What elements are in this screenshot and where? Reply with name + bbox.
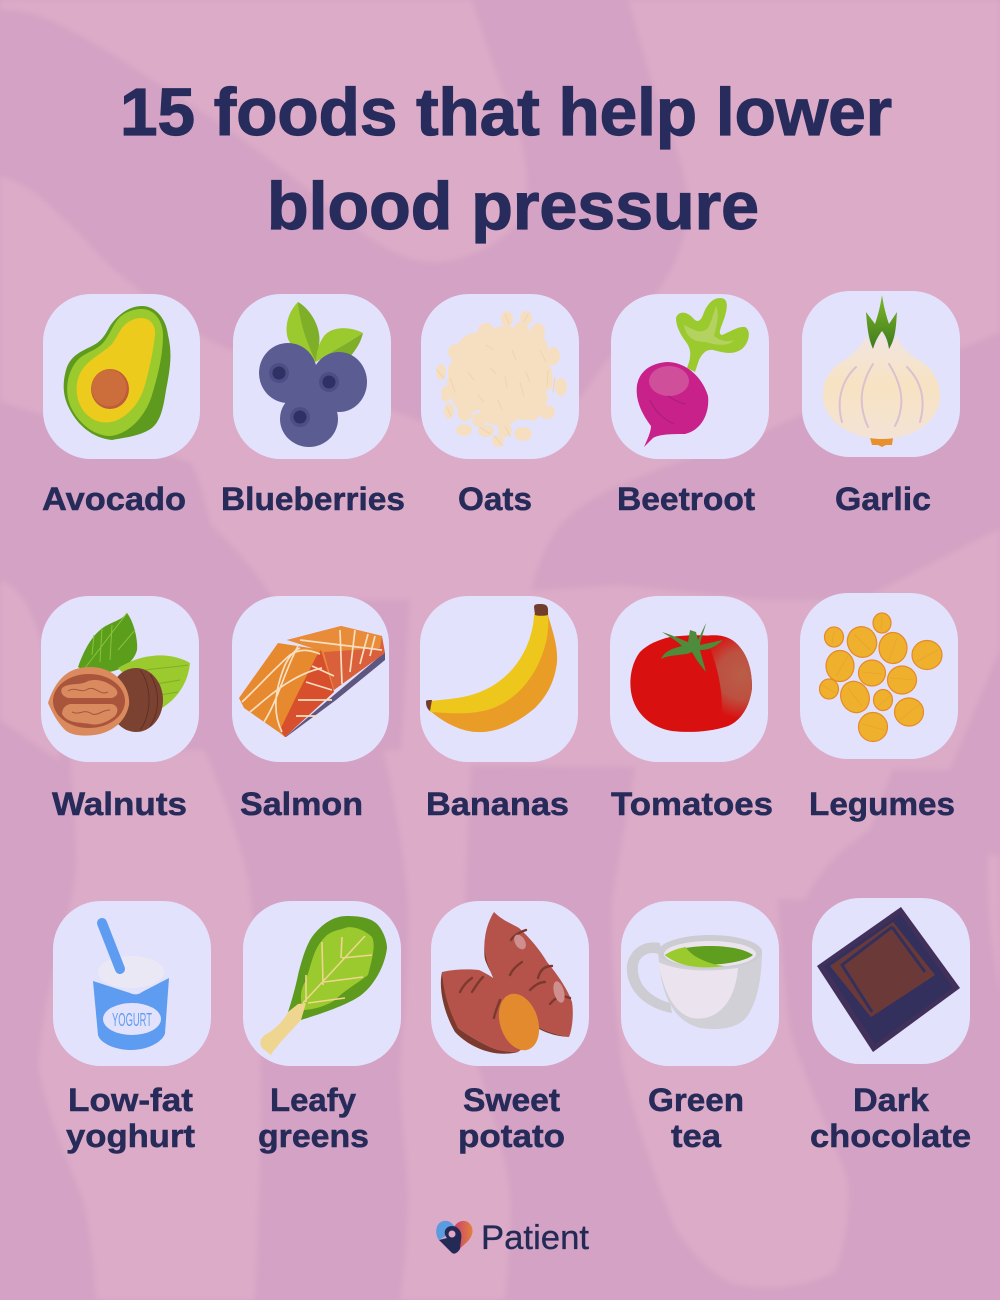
labels [810,1082,971,1154]
icon: blueberries [259,302,367,447]
icon: oats [436,311,567,447]
label: Oats [458,481,532,517]
item: blueberries [221,294,405,517]
label: Walnuts [52,786,187,822]
labels: potato [458,1118,565,1154]
label: Garlic [835,481,931,517]
label: Beetroot [617,481,755,517]
item: tomatoes [610,596,773,822]
label: Blueberries [221,481,405,517]
icon: salmon [239,626,385,737]
wordmark: Patient [481,1219,590,1257]
labels: Low-fat [68,1082,193,1118]
item: walnuts [41,596,199,822]
item: beetroot [611,294,769,517]
icon: chocolate [817,907,960,1052]
label: Salmon [240,786,363,822]
logo: Patient [436,1219,590,1257]
title [120,75,892,244]
labels [458,1082,565,1154]
labels: greens [258,1118,369,1154]
icon: beetroot [637,298,749,447]
item: sweet potato [431,901,589,1154]
icon: garlic [823,295,940,447]
labels: Green [648,1082,744,1118]
labels [66,1082,195,1154]
labels: Leafy [270,1082,356,1118]
title: 15 foods that help lower [120,75,892,150]
icon: heart [436,1221,473,1254]
item: avocado [42,294,200,517]
icon: tea cup [627,935,762,1029]
item: dark chocolate [810,898,971,1154]
labels: Sweet [463,1082,560,1118]
label: Tomatoes [611,786,773,822]
icon: tomato [630,623,752,732]
labels: chocolate [810,1118,971,1154]
label: Bananas [426,786,569,822]
item: oats [421,294,579,517]
item: low-fat yoghurt [53,901,211,1154]
item: leafy greens [243,901,401,1154]
item: bananas [420,596,578,822]
labels [258,1082,369,1154]
title: blood pressure [267,169,759,244]
labels: Dark [853,1082,929,1118]
icon: yoghurt: YOGURT [112,1010,152,1030]
item: green tea [621,901,779,1154]
icon: yoghurt [93,923,169,1050]
icon: sweet potato [441,912,573,1055]
item: salmon [232,596,389,822]
label: Avocado [42,481,186,517]
icon: avocado [64,306,170,440]
icon: leaf [260,916,387,1056]
label: Legumes [809,786,955,822]
item: legumes [800,593,958,822]
icon: walnuts [48,613,190,736]
icon: banana [426,604,557,732]
icon: legumes [820,613,942,742]
labels [648,1082,744,1154]
labels: tea [671,1118,721,1154]
item: garlic [802,291,960,517]
labels: yoghurt [66,1118,195,1154]
